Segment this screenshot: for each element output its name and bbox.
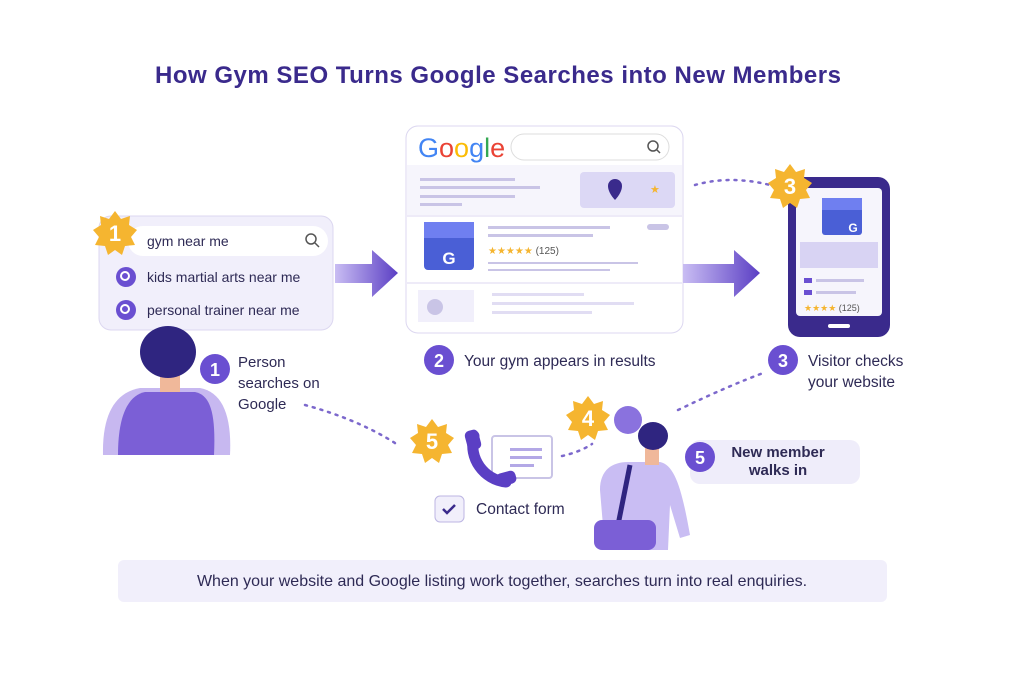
callout: new member walks in: 5: [695, 448, 705, 468]
phone: [788, 177, 890, 337]
bottom banner: When your website and Google listing work together, searches turn into real enquiries.: [197, 573, 807, 590]
panel: google results: ★: [650, 184, 660, 196]
panel: search box: gym near me: [147, 233, 229, 249]
icon: phone and form: [464, 429, 552, 487]
step 1 label: Person: [238, 354, 286, 371]
phone: ★★★★ (125): [804, 303, 860, 313]
step 1 label: [200, 354, 320, 413]
figure: person searching: [103, 326, 230, 455]
step 2 label: Your gym appears in results: [464, 353, 656, 370]
panel: google results: [406, 126, 683, 333]
badge: step 3: 3: [784, 174, 796, 199]
panel: google results: ★★★★★ (125): [488, 246, 559, 257]
figure: new members walking: [594, 406, 690, 550]
callout: new member walks in: [685, 440, 860, 484]
title: How Gym SEO Turns Google Searches into New Members: [155, 62, 841, 89]
badge: step 3: [768, 164, 812, 208]
contact form label: [435, 496, 565, 522]
badge: step 5 contact: [410, 419, 454, 463]
badge: step 1: 1: [109, 221, 121, 246]
panel: search box: kids martial arts near me: [147, 269, 300, 285]
dotted connectors: [305, 372, 766, 456]
callout: new member walks in: New member: [731, 444, 825, 461]
phone: G: [848, 221, 858, 235]
step 3 label: 3: [778, 351, 788, 371]
contact form label: Contact form: [476, 501, 565, 518]
arrow 2: [683, 250, 760, 297]
step 3 label: [768, 345, 904, 391]
step 1 label: Google: [238, 396, 286, 413]
panel: google results: Google: [418, 133, 505, 163]
dotted line to phone: [695, 180, 770, 185]
callout: new member walks in: walks in: [748, 462, 807, 479]
step 2 label: [424, 345, 656, 375]
step 3 label: Visitor checks: [808, 353, 904, 370]
step 1 label: 1: [210, 360, 220, 380]
badge: step 4: 4: [582, 406, 595, 431]
badge: step 4: [566, 396, 610, 440]
panel: google results: G: [442, 249, 456, 268]
panel: search box: personal trainer near me: [147, 302, 300, 318]
step 1 label: searches on: [238, 375, 320, 392]
step 2 label: 2: [434, 351, 444, 371]
step 3 label: your website: [808, 374, 895, 391]
bottom banner: [118, 560, 887, 602]
arrow 1: [335, 250, 398, 297]
badge: step 5 contact: 5: [426, 429, 438, 454]
badge: step 1: [93, 211, 137, 255]
panel: search box: [99, 216, 333, 330]
